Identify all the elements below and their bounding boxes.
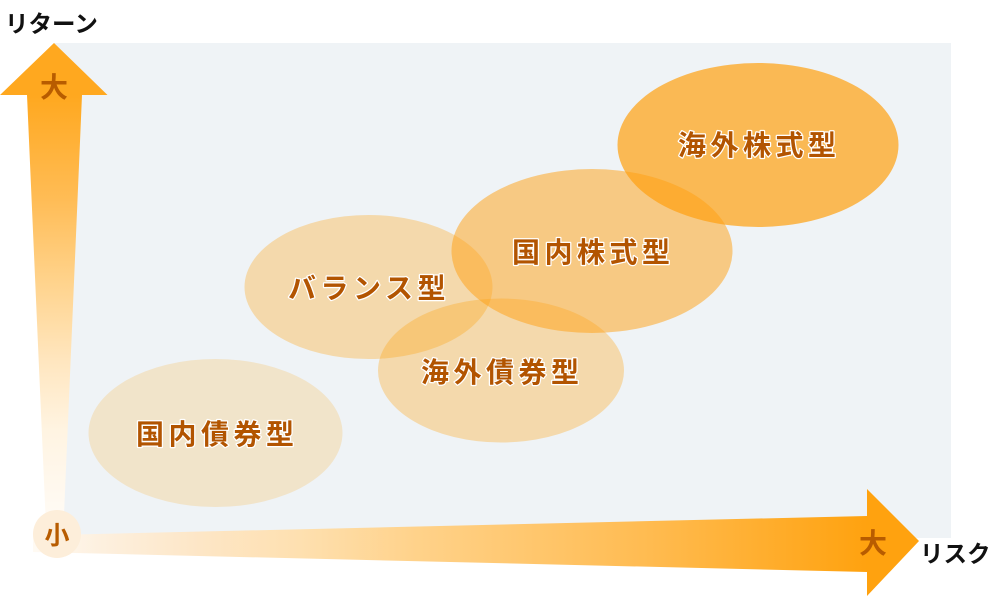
ellipse: 国内債券型 <box>88 359 342 507</box>
axis title: リターン: リターン <box>5 11 98 37</box>
label: risk high 大: 大 <box>859 528 887 559</box>
ellipse: 海外債券型 <box>378 298 624 442</box>
plot background <box>54 43 951 538</box>
arrow: risk axis <box>33 489 919 596</box>
ellipse: 海外株式型 <box>618 63 898 227</box>
label: 国内株式型: 国内株式型 <box>512 237 675 268</box>
arrow: return axis <box>0 43 108 515</box>
label: return high 大: 大 <box>40 72 68 103</box>
ellipse: 国内株式型 <box>452 169 732 333</box>
ellipse: バランス型 <box>244 215 492 359</box>
label: 海外債券型: 海外債券型 <box>421 357 584 388</box>
label: 国内債券型: 国内債券型 <box>136 419 299 450</box>
label: バランス型: バランス型 <box>288 273 450 304</box>
small origin marker <box>33 510 81 558</box>
label: 海外株式型: 海外株式型 <box>678 130 841 161</box>
small origin marker: 小 <box>44 522 70 550</box>
axis title: リスク: リスク <box>920 541 990 567</box>
